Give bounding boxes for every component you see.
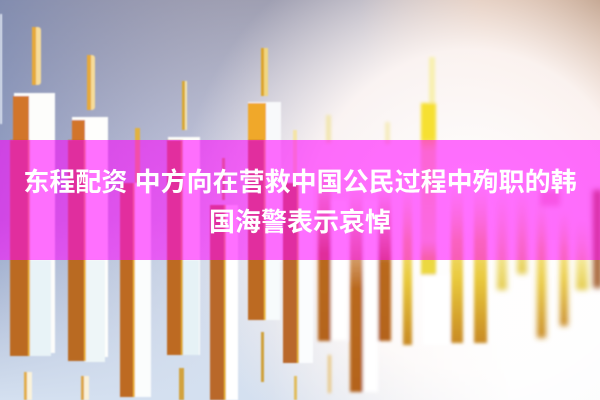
candle 10 (378, 122, 391, 341)
candle 9 (350, 185, 378, 392)
candle 4 (167, 81, 200, 400)
title: 国海警表示哀悼 (209, 207, 391, 237)
candle 12 (421, 57, 449, 345)
candle 2 (68, 55, 108, 400)
candle 3 (120, 128, 151, 397)
candle 1 (10, 27, 55, 400)
candle 14 (474, 185, 487, 343)
candle 6 (248, 48, 281, 382)
candle 7 (283, 130, 313, 400)
title (23, 167, 577, 237)
title: 东程配资 中方向在营救中国公民过程中殉职的韩 (23, 167, 577, 197)
candle 5 (210, 158, 238, 400)
candle 8 (318, 115, 347, 393)
candle 13 (451, 185, 463, 343)
candle 11 (403, 185, 412, 345)
pink title band (0, 140, 600, 260)
